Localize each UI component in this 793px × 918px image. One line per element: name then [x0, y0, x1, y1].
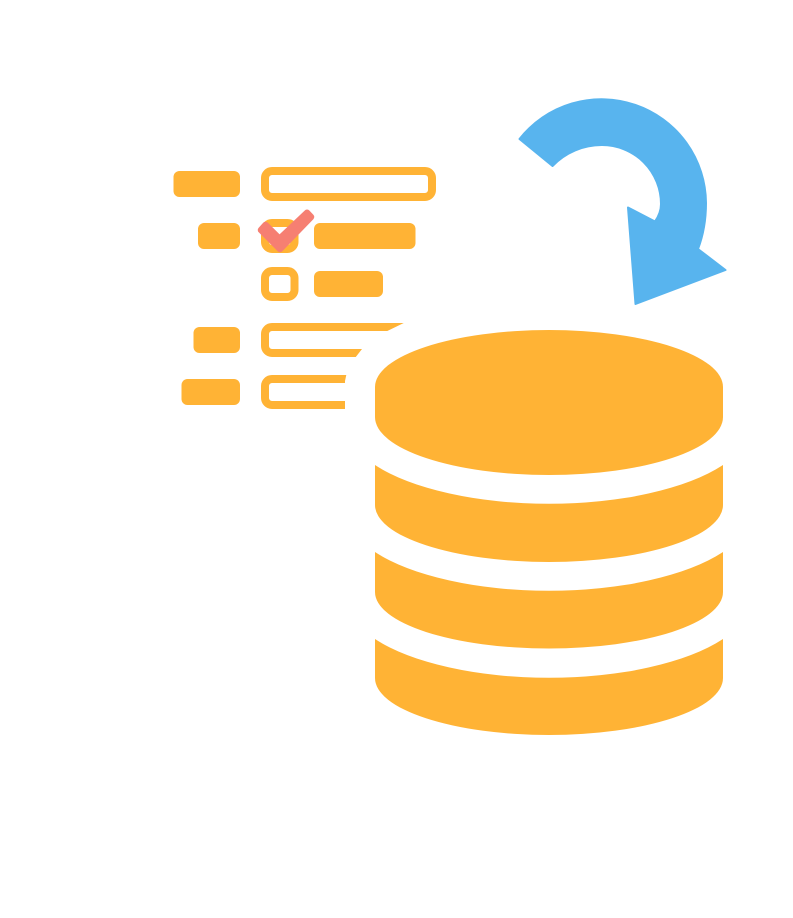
label bar: row 5: [182, 379, 240, 405]
input field: row 4: [265, 327, 432, 353]
checkbox: checked: [265, 223, 294, 249]
label bar: row 4: [194, 327, 240, 353]
input field: row 5: [265, 379, 432, 405]
icon: curved blue arrow: [520, 99, 726, 304]
checkbox: unchecked: [265, 271, 294, 297]
label bar: row 1: [174, 171, 240, 197]
option bar: checked option: [314, 223, 416, 249]
panel: form checklist: [174, 171, 445, 420]
database: top disk: [375, 330, 723, 475]
input field: row 1: [265, 171, 432, 197]
database: bottom layer: [375, 639, 723, 735]
database: third layer: [375, 552, 723, 648]
database: second layer: [375, 465, 723, 562]
white halo cutting the fields behind the database: [345, 322, 445, 420]
icon: database cylinder: [375, 330, 723, 735]
label bar: row 2: [198, 223, 240, 249]
icon: red check mark: [261, 213, 311, 249]
option bar: unchecked option: [314, 271, 383, 297]
